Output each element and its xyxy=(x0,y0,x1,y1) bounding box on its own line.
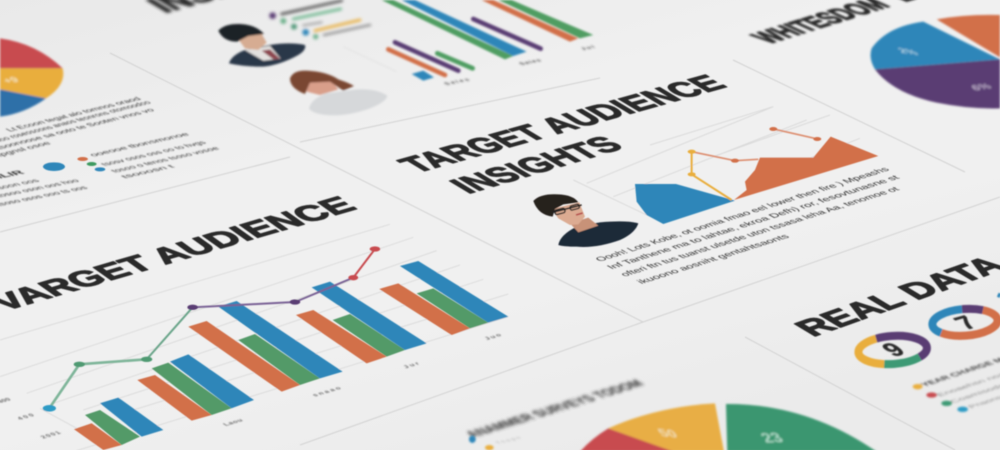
legend dots: left notes xyxy=(43,157,105,171)
pie chart: bottom: 23 xyxy=(757,430,787,446)
bar chart: top panel: Sales xyxy=(443,78,472,86)
panel: target audience insights (main) xyxy=(391,71,903,285)
pie chart: top right: 6% xyxy=(969,82,994,93)
axis labels: 400 xyxy=(16,413,37,421)
legend: survey xyxy=(469,436,523,450)
area chart: main panel xyxy=(573,107,878,224)
donut: number 9: 9 xyxy=(876,339,912,361)
axis labels: snaao xyxy=(311,386,343,398)
bar chart: top panel: Sales xyxy=(518,59,544,66)
text block: left notes: tsooosn t xyxy=(118,163,178,179)
heading: target audience insights: INSIGHTS xyxy=(442,132,632,198)
text block: main body copy: ofteri ftn tus tuanst ulsetde uton tssasa leha Aa, tenomoe ot xyxy=(618,186,903,278)
text block: left notes xyxy=(0,96,222,207)
pie chart: bottom xyxy=(580,403,877,450)
text block: left notes: ooeooe tbonsmonoe xyxy=(86,131,192,158)
pie chart: top right: 2% xyxy=(896,47,921,57)
axis labels: Jur xyxy=(402,361,422,369)
legend: real data: YEAR CHARGE M xyxy=(918,357,1000,388)
donut: number 7: 7 xyxy=(948,312,984,334)
bar chart with trend line xyxy=(0,224,508,450)
icon: person with glasses xyxy=(533,194,638,247)
legend: survey: Tsopn xyxy=(494,436,523,445)
text block: left notes: Lt Ecoon tegat alo tomnos oraod xyxy=(3,96,144,133)
panel: bottom survey pie xyxy=(462,378,877,450)
axis labels: Laou xyxy=(222,418,245,427)
legend: real data xyxy=(913,357,1000,412)
text block: main body copy: ikuoono aosniht gentahtsaonts xyxy=(635,233,793,285)
text block: main body copy xyxy=(593,166,903,285)
donut: number 9 xyxy=(857,334,928,366)
pie chart: top right xyxy=(871,15,1000,108)
pie chart: bottom: 50 xyxy=(655,427,681,441)
panel: left pie and notes xyxy=(0,38,222,207)
legend: top panel xyxy=(269,1,370,39)
heading: real data: REAL DATA xyxy=(787,252,1000,341)
axis labels: Juo xyxy=(483,333,504,341)
pie chart: left xyxy=(0,38,63,117)
panel: target audience bar chart xyxy=(0,192,508,450)
bar chart: top panel: Jul xyxy=(580,45,597,51)
heading: survey: ANAMMER SURVEYS TODOM xyxy=(462,378,648,440)
text block: left notes: tsosv osos oss oo to hvgs xyxy=(98,140,208,167)
pie chart: left: +9 xyxy=(1,76,22,85)
text block: left notes: tosoo o tenos tsoso vosoe xyxy=(108,145,222,174)
bar chart: top panel xyxy=(343,0,597,86)
panel: top audience insights xyxy=(139,0,597,115)
legend: real data: Coamisodn xyxy=(947,383,1000,404)
legend: real data: Enoaehsn noa xyxy=(934,371,1000,398)
heading: target audience insights: TARGET AUDIENCE xyxy=(391,71,735,177)
text block: main body copy: Inf Tanthene ma to lahtae, ekroa Defh) ror, fesovtunasne st xyxy=(605,174,903,271)
donut: number 7 xyxy=(931,293,1000,338)
axis labels xyxy=(0,333,504,440)
panel: history pie (top right) xyxy=(744,0,1000,108)
axis labels: 2001 xyxy=(39,431,63,440)
icon: woman portrait xyxy=(290,71,387,115)
icon: man portrait xyxy=(218,24,305,67)
panel: real data xyxy=(787,252,1000,412)
text block: main body copy: Oooh! Lots Kobe, ot oomia fmao eel lower then fire ) Mpeashs xyxy=(593,166,893,263)
